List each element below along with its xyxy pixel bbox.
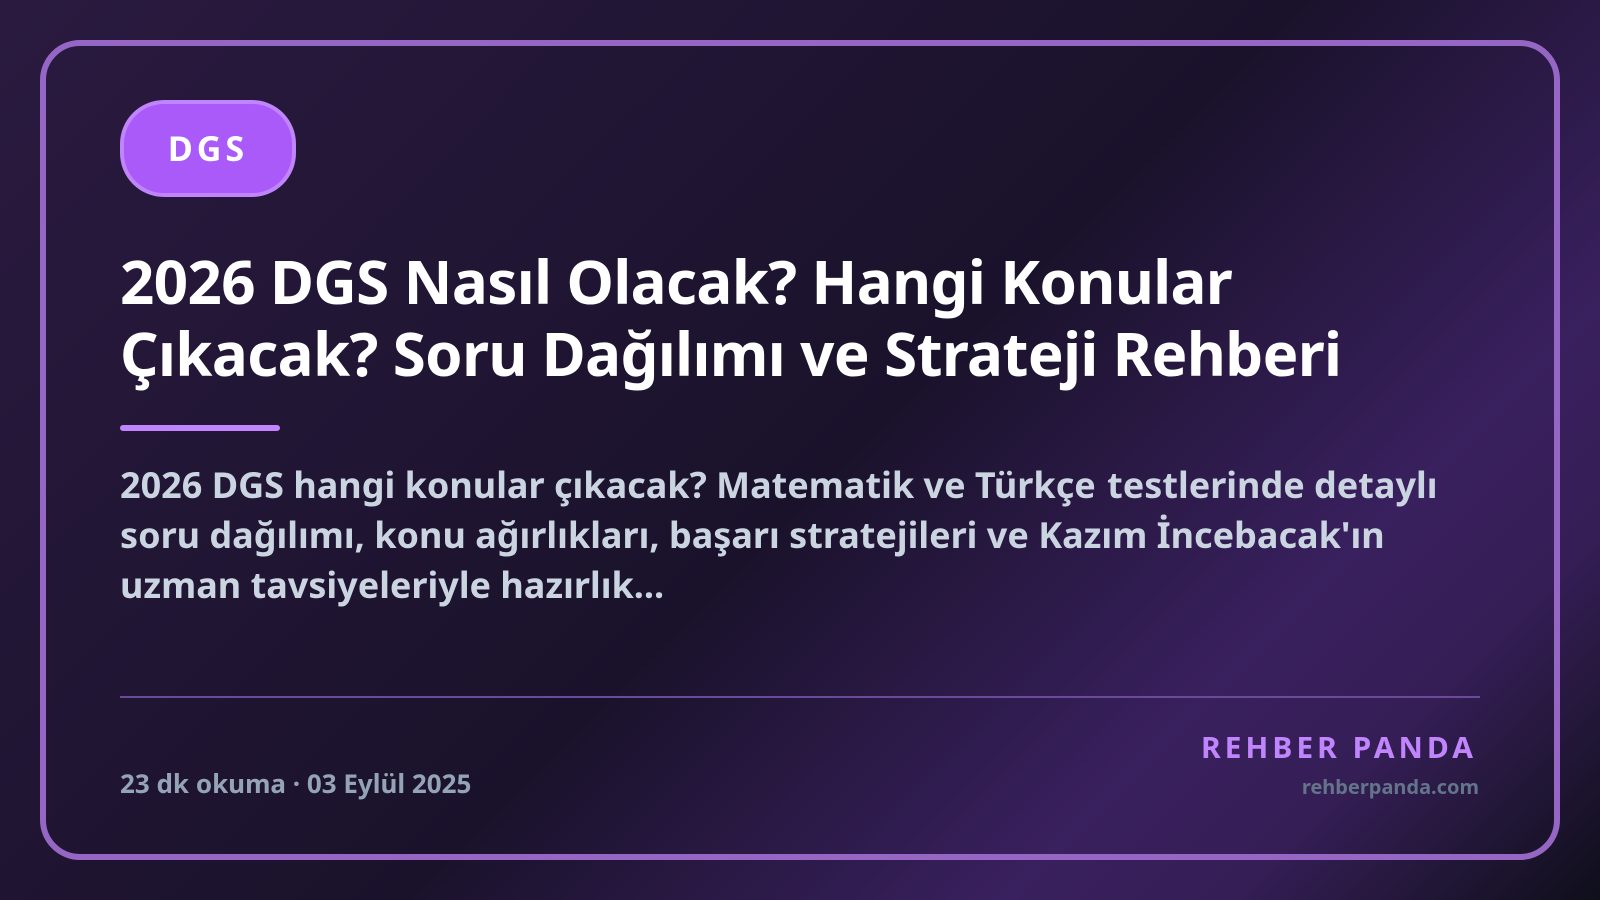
description: 2026 DGS hangi konular çıkacak? Matematik ve Türkçe testlerinde detaylı: [120, 460, 1438, 509]
title: [120, 240, 1341, 394]
brand url: rehberpanda.com: [1302, 773, 1479, 800]
meta: reading time and date: 23 dk okuma · 03 Eylül 2025: [120, 765, 471, 801]
footer divider: [120, 696, 1480, 698]
description: uzman tavsiyeleriyle hazırlık...: [120, 560, 664, 609]
accent bar: [120, 425, 280, 431]
badge: DGS: [120, 100, 296, 197]
description: soru dağılımı, konu ağırlıkları, başarı stratejileri ve Kazım İncebacak'ın: [120, 510, 1385, 559]
title: Çıkacak? Soru Dağılımı ve Strateji Rehberi: [120, 312, 1341, 394]
brand name: REHBER PANDA: [1201, 726, 1477, 767]
description: [120, 460, 1438, 609]
title: 2026 DGS Nasıl Olacak? Hangi Konular: [120, 240, 1232, 322]
badge: DGS: DGS: [168, 125, 248, 171]
